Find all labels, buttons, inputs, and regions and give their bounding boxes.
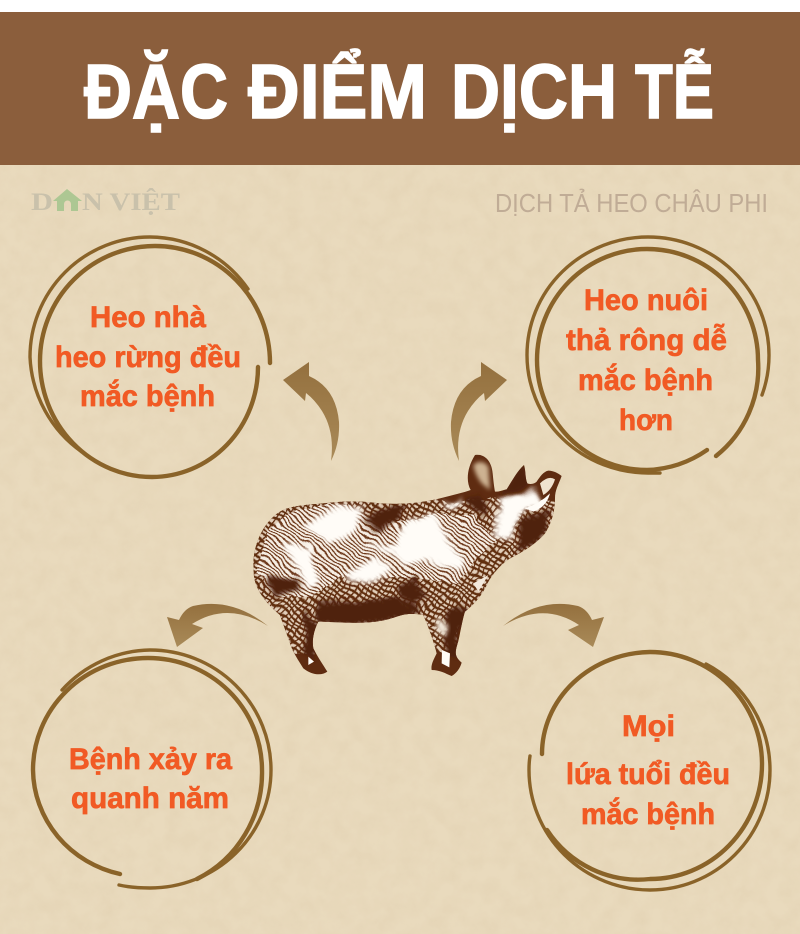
ring (527, 237, 769, 473)
arrow: to bottom-right circle (503, 604, 604, 647)
arrow: to top-right circle (451, 362, 507, 461)
arrow: to bottom-left circle (167, 604, 268, 647)
panel: top-left circle (30, 237, 270, 477)
label (566, 284, 727, 437)
arrow: to top-left circle (283, 362, 339, 461)
label: Heo nuôi (584, 284, 708, 317)
title: TỄ (635, 48, 714, 135)
label: Bệnh xảy ra (69, 743, 232, 776)
label (55, 301, 241, 413)
title: ĐIỂM (248, 48, 427, 135)
label: Heo nhà (90, 301, 206, 334)
label (69, 743, 232, 815)
title (84, 48, 714, 135)
ring (33, 650, 271, 888)
panel: top-right circle (527, 237, 769, 473)
top white strip (0, 0, 800, 12)
label: mắc bệnh (80, 379, 215, 413)
ring (529, 652, 770, 890)
logo: Dân Việt: D (31, 189, 53, 216)
label (566, 710, 730, 831)
panel: bottom-left circle (33, 650, 271, 888)
icon: green house (53, 189, 82, 211)
label: quanh năm (71, 782, 229, 815)
label: thả rông dễ (566, 323, 727, 357)
title: DỊCH (451, 49, 617, 135)
label: heo rừng đều (55, 341, 241, 374)
label: hơn (619, 404, 673, 437)
panel: bottom-right circle (529, 652, 770, 890)
leg and face highlights (308, 462, 555, 667)
section label: DỊCH TẢ HEO CHÂU PHI (495, 188, 768, 218)
logo: Dân Việt: N VIỆT (82, 188, 180, 216)
ring (30, 237, 270, 477)
pig illustration (253, 454, 562, 676)
label: Mọi (622, 710, 675, 743)
label: lứa tuổi đều (566, 758, 730, 791)
upper hatch (257, 505, 497, 597)
logo: Dân Việt (31, 188, 180, 216)
title banner (0, 12, 800, 165)
label: mắc bệnh (578, 363, 713, 397)
label: mắc bệnh (581, 797, 715, 831)
title: ĐẶC (84, 49, 228, 135)
